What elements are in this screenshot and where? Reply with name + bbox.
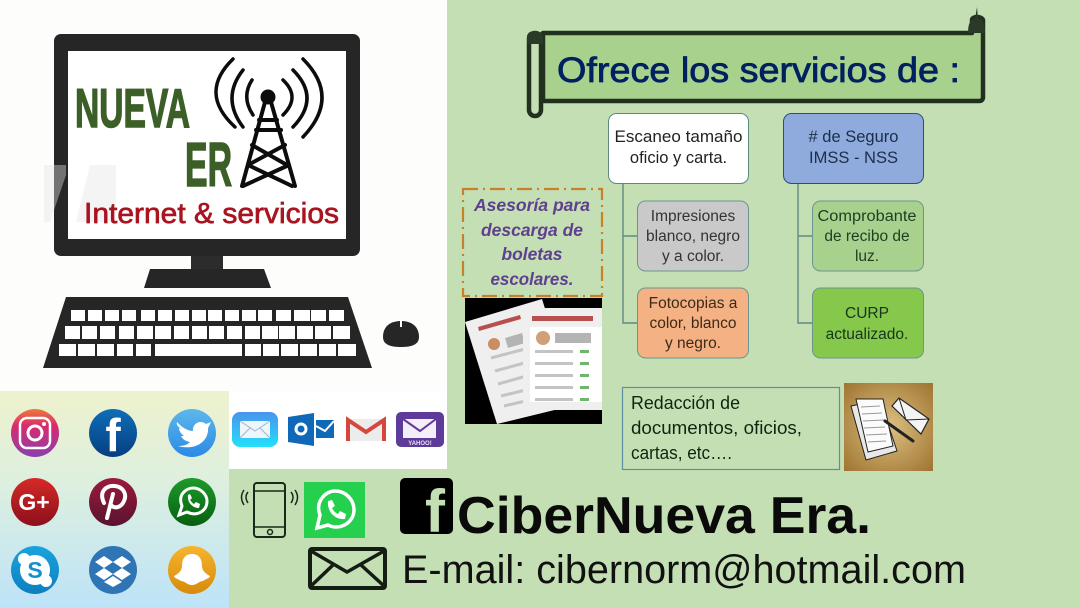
icon: mouse	[383, 321, 419, 347]
box: escaneo	[608, 114, 748, 184]
box: escaneo: Escaneo tamaño	[614, 128, 742, 146]
box: asesoria callout: escolares.	[490, 269, 574, 289]
icon: envelope	[310, 549, 385, 588]
icon: phone	[242, 483, 298, 537]
panel: email providers	[229, 391, 447, 469]
logo text: NUEVA: NUEVA	[75, 77, 190, 139]
icon: instagram	[11, 409, 59, 457]
box: curp: actualizado.	[826, 326, 908, 343]
icon: facebook	[89, 409, 137, 461]
image: letters on desk	[844, 383, 933, 471]
connector lines	[623, 184, 812, 323]
box: curp: CURP	[845, 305, 889, 322]
icon: monitor	[54, 34, 360, 288]
icon: outlook	[288, 413, 334, 446]
box: impresiones	[638, 201, 748, 271]
logo text: ER: ER	[185, 131, 232, 200]
box: impresiones: Impresiones	[651, 208, 735, 225]
icon: google plus: G+	[18, 489, 50, 515]
icon: pinterest	[89, 478, 137, 526]
panel: social icons	[0, 391, 229, 608]
icon: yahoo mail: YAHOO!	[408, 441, 432, 447]
title banner	[527, 7, 985, 116]
icon: twitter	[168, 409, 216, 457]
icon: snapchat	[168, 546, 216, 594]
box: seguro: IMSS - NSS	[809, 149, 898, 167]
icon: gmail	[346, 419, 386, 441]
icon: mail	[232, 412, 278, 447]
text: facebook name: CiberNueva Era.	[457, 487, 871, 545]
box: fotocopias	[638, 288, 748, 358]
box: fotocopias: color, blanco	[649, 315, 737, 332]
icon: dropbox	[89, 546, 137, 594]
heading: Ofrece los servicios de :	[557, 50, 960, 90]
box: asesoria callout	[463, 189, 602, 296]
icon: skype: S	[27, 557, 43, 583]
box: comprobante: de recibo de	[824, 228, 910, 245]
box: impresiones: y a color.	[662, 248, 724, 265]
icon: whatsapp square	[304, 482, 365, 538]
box: redaccion: Redacción de	[631, 393, 740, 413]
box: curp	[812, 288, 924, 358]
icon: keyboard	[43, 297, 372, 368]
box: redaccion: documentos, oficios,	[631, 418, 802, 438]
box: fotocopias: Fotocopias a	[649, 295, 738, 312]
box: redaccion	[622, 388, 840, 470]
icon: whatsapp	[168, 478, 216, 526]
box: impresiones: blanco, negro	[646, 228, 740, 245]
panel: logo computer	[0, 0, 447, 391]
box: fotocopias: y negro.	[665, 335, 721, 352]
icon: google plus	[11, 478, 59, 526]
icon: skype	[11, 546, 59, 594]
watermark	[44, 165, 116, 222]
box: seguro: # de Seguro	[809, 128, 898, 146]
icon: facebook logo: f	[425, 478, 446, 545]
box: escaneo: oficio y carta.	[630, 149, 727, 167]
icon: yahoo mail	[396, 412, 444, 447]
box: asesoria callout: descarga de	[481, 220, 583, 240]
icon: facebook: f	[105, 409, 121, 461]
box: redaccion: cartas, etc….	[631, 443, 732, 463]
box: asesoria callout: Asesoría para	[473, 195, 590, 215]
box: comprobante	[812, 201, 924, 271]
logo text: Internet & servicios: Internet & servicios	[84, 198, 339, 230]
text: email: E-mail: cibernorm@hotmail.com	[402, 548, 966, 592]
box: asesoria callout: boletas	[502, 244, 563, 264]
box: seguro	[784, 114, 924, 184]
icon: facebook logo	[400, 478, 453, 545]
box: comprobante: luz.	[855, 248, 879, 265]
icon: antenna tower	[216, 59, 322, 186]
image: report cards	[465, 298, 602, 424]
box: comprobante: Comprobante	[818, 208, 916, 225]
